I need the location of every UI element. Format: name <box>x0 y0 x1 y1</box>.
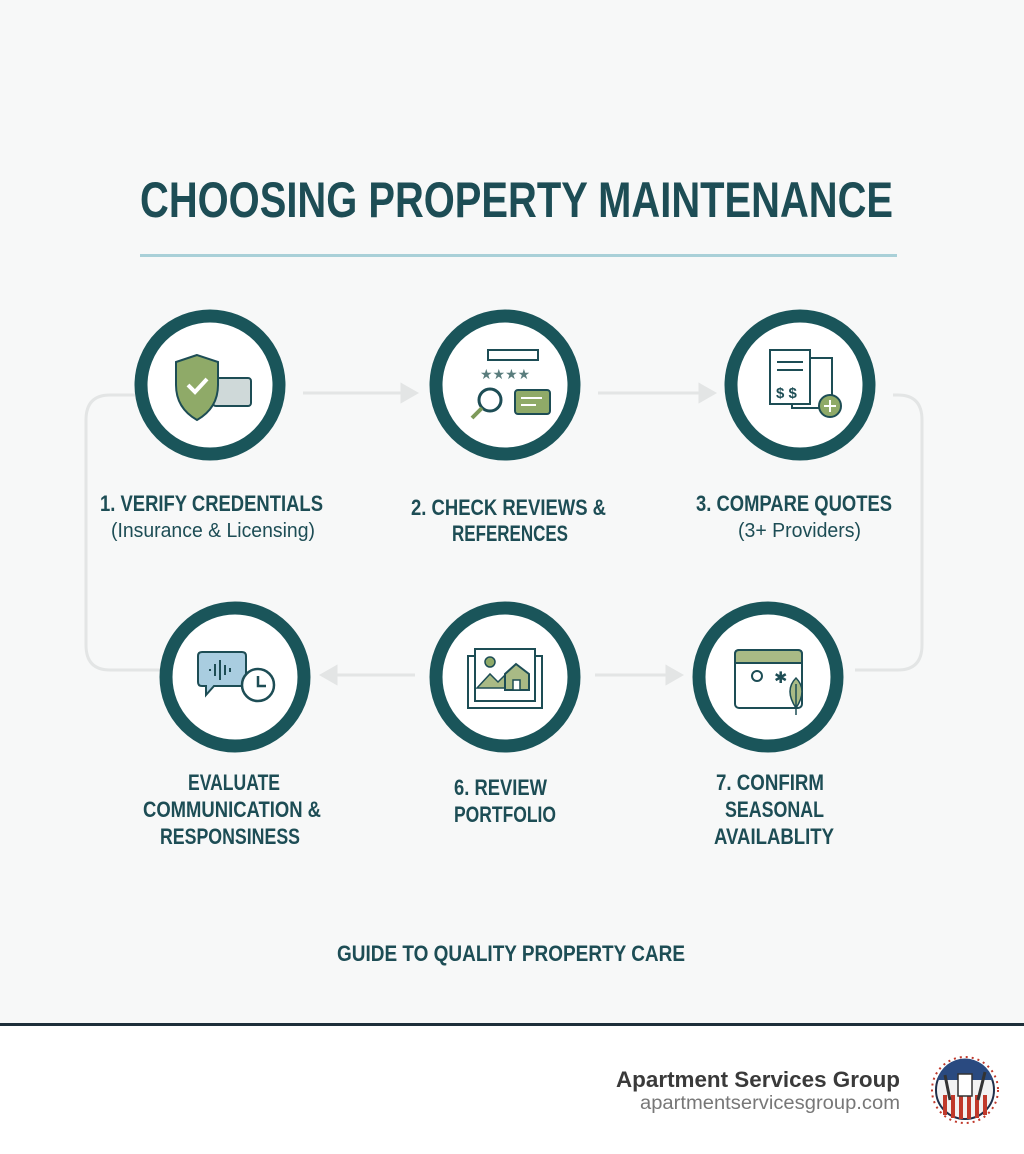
step 4 circle + icon <box>166 608 304 746</box>
step 2 label: REFERENCES <box>452 521 568 546</box>
footer <box>0 1023 1024 1154</box>
step 4 label: RESPONSINESS <box>160 824 300 849</box>
step 7 label <box>714 770 834 849</box>
step 2 label: 2. CHECK REVIEWS & <box>411 495 606 520</box>
step 4 label: EVALUATE <box>188 770 280 795</box>
footer: apartmentservicesgroup.com <box>640 1093 900 1114</box>
step 7 label: AVAILABLITY <box>714 824 834 849</box>
step 6 label: PORTFOLIO <box>454 802 556 827</box>
arrows <box>303 385 714 683</box>
step 3 circle + icon <box>731 316 869 454</box>
step 1 label: 1. VERIFY CREDENTIALS <box>100 491 323 516</box>
step 3 label: (3+ Providers) <box>738 520 861 542</box>
step 6 circle + icon <box>436 608 574 746</box>
step 1 circle + icon <box>141 316 279 454</box>
step 7 circle + icon <box>699 608 837 746</box>
step 1 label <box>100 491 323 542</box>
step 3 label: 3. COMPARE QUOTES <box>696 491 892 516</box>
logo <box>932 1057 998 1123</box>
step 6 label: 6. REVIEW <box>454 775 547 800</box>
step 4 label <box>143 770 321 849</box>
step 7 label: SEASONAL <box>725 797 824 822</box>
step 2 label <box>411 495 606 546</box>
step 7 label: 7. CONFIRM <box>716 770 824 795</box>
subtitle: GUIDE TO QUALITY PROPERTY CARE <box>337 941 685 966</box>
step 4 label: COMMUNICATION & <box>143 797 321 822</box>
step 6 label <box>454 775 556 827</box>
connector loop <box>86 395 922 670</box>
footer: Apartment Services Group <box>616 1067 900 1092</box>
step 2 circle + icon: ★★★★ <box>480 367 530 383</box>
step 3 circle + icon: $ $ <box>776 385 798 402</box>
step 1 label: (Insurance & Licensing) <box>111 520 315 542</box>
step 3 label <box>696 491 892 542</box>
step 7 circle + icon: ✱ <box>774 668 787 687</box>
step 2 circle + icon <box>436 316 574 454</box>
